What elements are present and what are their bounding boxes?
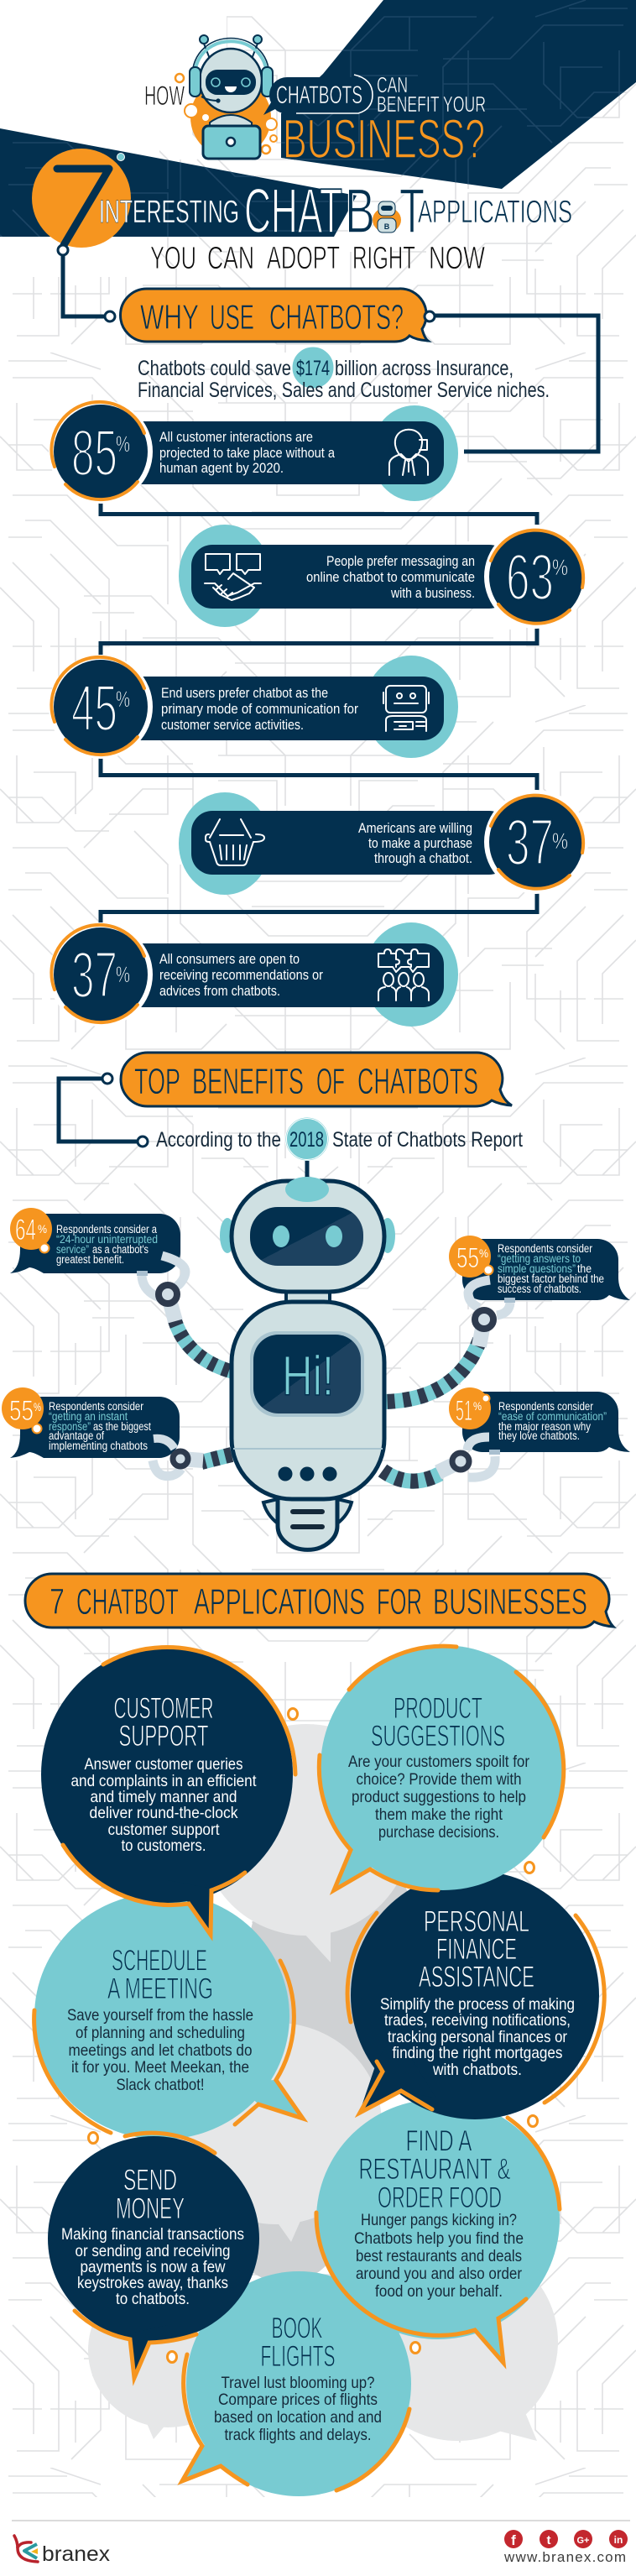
application bubble: find a restaurant: best restaurants and deals [356,2247,522,2265]
application bubble: customer support: to customers. [121,1837,206,1855]
stat panel: 37 percent recommendations [49,922,458,1027]
application bubble: find a restaurant: Hunger pangs kicking in? [361,2211,517,2229]
application bubble: book flights: Travel lust blooming up? [222,2374,375,2392]
stat panel: 37 percent purchase: % [552,828,568,854]
application bubble: schedule a meeting: Slack chatbot! [116,2076,205,2094]
header dark shape right [281,0,636,189]
benefit callout: 64 percent: greatest benefit. [56,1253,124,1266]
application bubble: schedule a meeting: A MEETING [107,1972,213,2005]
benefit callout: 55 percent instant response: Respondents consider [49,1400,143,1413]
benefit callout: 55 percent simple questions [449,1236,630,1300]
application bubble: personal finance assistance: trades, receiving notifications, [384,2011,571,2030]
tagline: you can adopt right now [150,241,485,276]
application bubble: customer support: CUSTOMER [114,1692,213,1725]
application bubble: find a restaurant: Chatbots help you find the [354,2229,524,2248]
application bubble: book flights: track flights and delays. [225,2426,371,2444]
stat panel: 63 percent: with a business. [390,586,475,601]
benefit callout: 55 percent instant response: 55 [9,1395,34,1427]
heading: top benefits of chatbots: CHATBOTS [357,1061,478,1102]
application bubble: schedule a meeting: it for you. Meet Meekan, the [71,2058,249,2077]
subtitle: interesting chatbot applications: CHAT [244,175,342,246]
benefit callout: 55 percent simple questions: “getting answers to [498,1252,581,1265]
application bubble: find a restaurant: ORDER FOOD [378,2182,502,2214]
savings statement: billion across Insurance, [335,357,513,380]
heading: top benefits of chatbots [121,1053,512,1106]
savings statement: Chatbots could save [138,357,291,380]
stat panel: 63 percent: % [552,555,568,580]
subtitle: interesting chatbot applications: B [345,175,375,246]
subtitle: interesting chatbot applications: INTERESTING [99,195,239,230]
heading: top benefits of chatbots: OF [316,1061,345,1102]
stat panel: 85 percent: All customer interactions are [159,430,313,445]
savings statement [138,347,550,402]
stat panel: 45 percent: % [116,687,130,712]
application bubble: product suggestions: SUGGESTIONS [371,1720,505,1753]
header title: how chatbots can benefit your business: CAN [377,72,408,97]
application bubble: product suggestions: PRODUCT [394,1692,482,1725]
heading: why use chatbots [121,289,428,342]
benefit callout: 55 percent instant response [2,1387,180,1458]
stat panel: 45 percent [49,655,458,759]
heading: top benefits of chatbots: BENEFITS [192,1061,304,1102]
application bubble: product suggestions [319,1645,566,1892]
report line: State of Chatbots Report [332,1128,523,1152]
stat panel: 45 percent: 45 [71,671,117,745]
benefit callout: 55 percent instant response: % [34,1400,41,1413]
application bubble: schedule a meeting: Save yourself from the hassle [67,2006,253,2025]
benefit callout: 55 percent simple questions: Respondents consider [498,1242,592,1255]
benefit callout: 55 percent simple questions: success of chatbots. [498,1283,581,1295]
application bubble: send money: MONEY [116,2192,185,2225]
social icons and website [503,2530,628,2565]
subtitle: interesting chatbot applications: T [399,175,425,246]
heading: why use chatbots: WHY [140,297,199,337]
application bubble: schedule a meeting [34,1893,303,2140]
stat panel: 37 percent recommendations: All consumers are open to [159,952,300,967]
application bubble: product suggestions: them make the right [375,1805,503,1824]
stat panel: 63 percent [179,525,588,629]
benefit callout: 51 percent: the major reason why [498,1420,591,1433]
header title: how chatbots can benefit your business: BENEFIT YOUR [377,91,486,117]
stat panel: 37 percent purchase: Americans are willing [358,821,472,836]
application bubble: product suggestions: purchase decisions. [378,1823,499,1842]
benefit callout: 55 percent simple questions: the [577,1262,592,1275]
stat panel: 45 percent: primary mode of communication for [161,702,358,717]
application bubble: personal finance assistance: with chatbots. [432,2061,522,2079]
grey background speech bubbles [88,1724,558,2441]
header title: how chatbots can benefit your business: HOW [144,81,185,111]
application bubble: book flights: Compare prices of flights [218,2391,378,2409]
benefit callout: 64 percent: as a chatbot's [92,1243,149,1256]
heading: why use chatbots: USE [210,297,254,337]
heading: 7 chatbot applications: 7 [50,1581,65,1622]
subtitle: interesting chatbot applications: B [384,222,390,231]
robot arms [137,1256,515,1481]
application bubble: book flights [181,2271,411,2496]
stat panel: 37 percent recommendations: receiving recommendations or [159,968,323,983]
benefit callout: 55 percent instant response: implementing chatbots [49,1440,148,1452]
stat panel: 85 percent: % [116,431,130,457]
stat panel: 37 percent purchase [179,790,588,895]
application bubble: personal finance assistance [347,1871,604,2119]
application bubble: send money: keystrokes away, thanks [77,2274,228,2292]
application bubble: find a restaurant: RESTAURANT & [359,2153,510,2186]
header title: how chatbots can benefit your business: BUSINESS? [283,107,485,170]
central robot: Hi! [282,1345,334,1408]
tagline: you can adopt right now: NOW [429,241,485,276]
application bubble: personal finance assistance: FINANCE [436,1933,517,1966]
subtitle: interesting chatbot applications [99,175,572,246]
benefit callout: 51 percent: “ease of communication” [498,1410,607,1423]
stat panel: 63 percent: People prefer messaging an [326,554,475,569]
stat panel: 85 percent: projected to take place without a [159,446,336,461]
stat panel: 37 percent recommendations: 37 [71,938,117,1011]
application bubble: find a restaurant: around you and also order [356,2265,522,2283]
benefit callout: 64 percent: “24-hour uninterrupted [56,1233,158,1246]
application bubble: personal finance assistance: Simplify the process of making [380,1995,575,2014]
footer divider [12,2520,630,2521]
tagline: you can adopt right now: ADOPT [267,241,340,276]
application bubble: personal finance assistance: ASSISTANCE [419,1961,534,1993]
benefit callout: 55 percent simple questions: biggest factor behind the [498,1272,604,1285]
application bubble: schedule a meeting: SCHEDULE [112,1944,207,1978]
application bubble: product suggestions: choice? Provide them with [356,1770,522,1789]
stat panel: 37 percent purchase: to make a purchase [368,836,472,851]
social icons and website: in [614,2534,623,2546]
benefit callout: 64 percent: 64 [15,1214,36,1246]
benefit callout: 55 percent instant response: “getting an instant [49,1410,128,1423]
tagline: you can adopt right now: YOU [150,241,196,276]
application bubble: product suggestions: Are your customers spoilt for [348,1753,529,1771]
report line: According to the [156,1128,281,1152]
small orange rings [89,1709,537,2362]
application bubble: send money: payments is now a few [81,2258,226,2276]
connector from seven to heading [58,245,115,321]
logo: branex [14,2536,111,2566]
stat panel: 63 percent: online chatbot to communicate [306,570,475,585]
application bubble: customer support: SUPPORT [119,1720,208,1753]
stat panel: 37 percent recommendations: % [116,962,130,987]
benefit callout: 55 percent simple questions: 55 [456,1242,479,1274]
social icons and website: www.branex.com [503,2549,626,2565]
benefit callout: 55 percent simple questions: simple questions” [498,1262,576,1275]
application bubble: book flights: BOOK [272,2312,322,2345]
application bubble: send money: SEND [123,2164,177,2197]
connectors between stats [101,499,537,927]
central robot [220,1161,395,1549]
benefit callout: 51 percent: Respondents consider [498,1400,593,1413]
application bubble: personal finance assistance: tracking personal finances or [388,2028,567,2046]
application bubble: send money: Making financial transactions [61,2225,244,2244]
social icons and website: f [511,2532,516,2548]
benefit callout: 55 percent simple questions: % [479,1246,488,1260]
stat panel: 45 percent: End users prefer chatbot as the [161,686,328,701]
application bubble: customer support: and complaints in an efficient [70,1772,257,1790]
heading: top benefits of chatbots: TOP [134,1061,180,1102]
application bubble: send money: or sending and receiving [76,2242,230,2260]
stat panel: 85 percent: 85 [71,415,117,489]
application bubble: find a restaurant: food on your behalf. [375,2282,503,2301]
header dark shape left [0,128,357,237]
application bubble: customer support: Answer customer queries [84,1755,243,1774]
heading: 7 chatbot applications [25,1574,613,1628]
benefit callout: 64 percent: service” [56,1243,89,1256]
tagline: you can adopt right now: CAN [207,241,254,276]
application bubble: send money [48,2133,259,2380]
stat panel: 37 percent purchase: through a chatbot. [374,851,472,866]
benefit callout: 51 percent: 51 [456,1395,472,1427]
heading: 7 chatbot applications: FOR [377,1581,422,1622]
stat panel: 63 percent: 63 [506,540,554,614]
tagline: you can adopt right now: RIGHT [352,241,415,276]
social icons and website: t [547,2533,550,2547]
stat panel: 85 percent [49,400,458,504]
application bubble: customer support: deliver round-the-clock [89,1804,238,1822]
savings statement: $174 [296,357,330,380]
application bubble: book flights: FLIGHTS [260,2340,336,2373]
benefit callout: 51 percent: they love chatbots. [498,1429,580,1442]
report line: 2018 [289,1128,324,1152]
application bubble: send money: to chatbots. [116,2290,190,2308]
heading: 7 chatbot applications: CHATBOT [76,1581,179,1622]
application bubble: find a restaurant: FIND A [406,2125,472,2157]
benefit callout: 51 percent: % [473,1399,482,1413]
benefit callout: 64 percent: Respondents consider a [56,1223,157,1236]
big seven badge [32,149,131,248]
application bubble: schedule a meeting: of planning and scheduling [76,2024,245,2042]
social icons and website: G+ [577,2536,589,2546]
application bubble: customer support: and timely manner and [91,1788,237,1806]
report line [156,1117,523,1161]
heading: 7 chatbot applications: APPLICATIONS [194,1581,365,1622]
header robot mascot [175,35,277,159]
stat panel: 45 percent: customer service activities. [161,718,304,733]
application bubble: schedule a meeting: meetings and let chatbots do [69,2041,253,2060]
stat panel: 85 percent: human agent by 2020. [159,461,284,476]
header title: how chatbots can benefit your business [144,72,486,170]
application bubble: find a restaurant [316,2099,560,2364]
benefit callout: 64 percent: % [38,1222,47,1236]
stat panel: 37 percent purchase: 37 [506,805,554,879]
connector from heading to first stat [425,311,598,452]
benefit callout: 64 percent [10,1208,180,1273]
header title: how chatbots can benefit your business: CHATBOTS [276,81,362,109]
application bubble: product suggestions: product suggestions to help [352,1788,526,1806]
benefit callout: 55 percent instant response: advantage of [49,1429,104,1442]
application bubble: personal finance assistance: finding the right mortgages [393,2044,563,2062]
connector to state of chatbots report [59,1074,148,1147]
stat panel: 37 percent recommendations: advices from chatbots. [159,984,280,999]
benefit callout: 51 percent [449,1387,630,1452]
application bubble: customer support: customer support [107,1821,220,1839]
logo: branex: branex [42,2542,111,2566]
application bubble: personal finance assistance: PERSONAL [424,1905,529,1938]
benefit callout: 55 percent instant response: as the biggest [93,1420,151,1433]
application bubble: customer support [41,1646,295,1936]
heading: why use chatbots: CHATBOTS? [269,297,404,337]
application bubble: book flights: based on location and and [214,2408,382,2427]
benefit callout: 55 percent instant response: response” [49,1420,91,1433]
